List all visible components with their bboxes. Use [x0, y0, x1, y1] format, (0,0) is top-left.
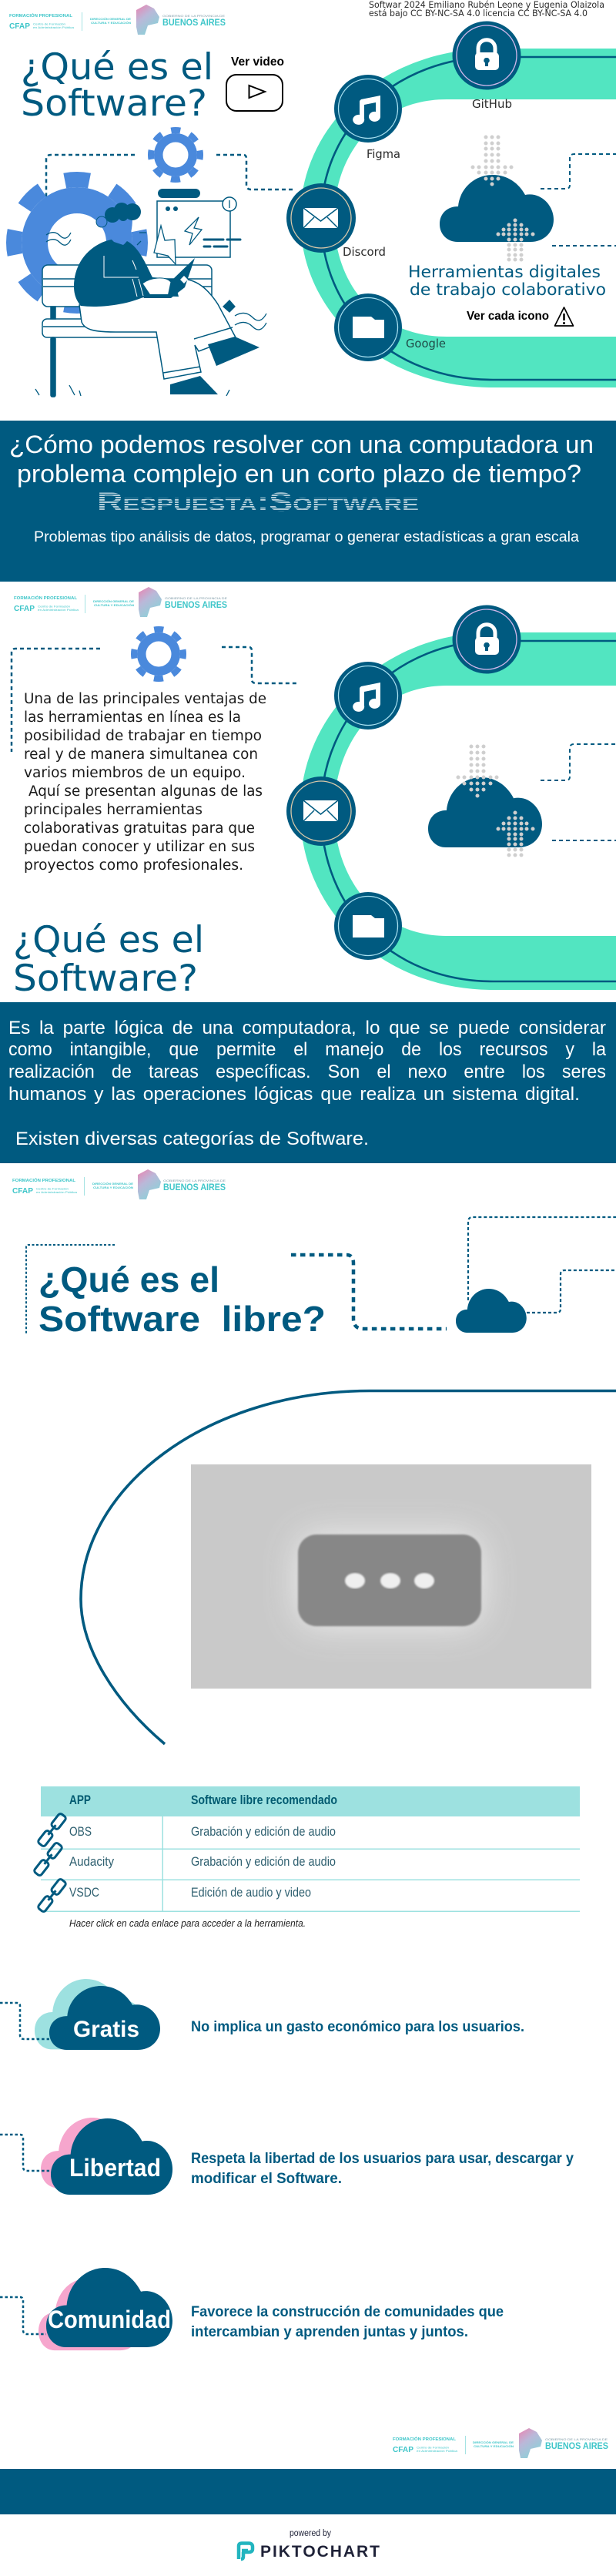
icon: top gear [151, 130, 200, 179]
logo header 1: CFAP [9, 22, 30, 31]
band: question: ¿Cómo podemos resolver con una computadora un [9, 431, 594, 458]
title: Software libre: ¿Qué es el [38, 1259, 219, 1300]
logo header 1: en Administración Pública [33, 26, 74, 29]
table rows: Edición de audio y video [191, 1885, 311, 1900]
text block: ventajas: Una de las principales ventajas de [24, 691, 266, 707]
torso [74, 239, 179, 307]
logo header 3: FORMACIÓN PROFESIONAL [12, 1177, 76, 1183]
title: Qué es el Software second [13, 919, 204, 1000]
item: Libertad: Respeta la libertad de los usuarios para usar, descargar y [191, 2151, 574, 2167]
table header [41, 1786, 580, 1816]
band: software definition: como intangible, que permite el manejo de los recursos y la [8, 1039, 607, 1060]
heading: Herramientas digitales [408, 263, 606, 300]
title: Software libre [38, 1259, 326, 1339]
heading: Herramientas digitales: Herramientas digitales [408, 263, 601, 282]
logo header 1: BUENOS AIRES [162, 18, 226, 28]
text: Ver video: Ver video [231, 55, 284, 69]
text block: ventajas: varios miembros de un equipo. [24, 765, 246, 781]
logo header 1 [9, 5, 226, 35]
item: Libertad [0, 2118, 574, 2195]
title: Software libre: Software libre? [38, 1299, 326, 1339]
navy track line [321, 57, 616, 380]
icon: play button [226, 75, 283, 111]
logo header 3: en Administración Pública [36, 1191, 77, 1194]
item: Libertad: Libertad [69, 2154, 161, 2182]
logo header 2: FORMACIÓN PROFESIONAL [14, 595, 78, 601]
icon: music note [334, 75, 402, 143]
logo header 2: Centro de Formación [38, 605, 70, 609]
table rows: Audacity [69, 1854, 114, 1869]
band: software definition: humanos y las operaciones lógicas que realiza un sistema digital. [8, 1084, 580, 1105]
item: Gratis: Gratis [73, 2017, 139, 2042]
icon: envelope [286, 776, 356, 846]
footer band [0, 2469, 616, 2514]
motion marks [35, 233, 266, 396]
item: Gratis [0, 1979, 524, 2050]
title: Qué es el Software: Software? [21, 82, 207, 125]
logo header 2: BUENOS AIRES [165, 601, 227, 610]
text block: ventajas: las herramientas en línea es la [24, 709, 241, 726]
band: question: Problemas tipo análisis de datos, programar o generar estadísticas a gran escala [34, 529, 579, 545]
table header: Software libre recomendado [191, 1793, 337, 1807]
tool labels: GitHub [472, 97, 512, 111]
icon: folder [334, 892, 402, 960]
logo header 3: BUENOS AIRES [163, 1183, 226, 1192]
dotted connectors right [541, 744, 616, 840]
logo footer: Centro de Formación [417, 2447, 449, 2450]
table header: APP [69, 1793, 91, 1807]
logo header 3: GOBIERNO DE LA PROVINCIA DE [163, 1179, 226, 1182]
shoes [170, 337, 259, 394]
logo footer: en Administración Pública [417, 2450, 457, 2453]
logo header 1: DIRECCIÓN GENERAL DE [90, 17, 132, 21]
hand and laptop [142, 278, 171, 297]
logo footer: CULTURA Y EDUCACIÓN [474, 2444, 514, 2448]
credits text: está bajo CC BY-NC-SA 4.0 licencia CC BY-NC-SA 4.0 [369, 8, 588, 18]
band: software definition [0, 1002, 616, 1163]
text block: ventajas: principales herramientas [24, 802, 203, 818]
logo header 1: GOBIERNO DE LA PROVINCIA DE [162, 14, 225, 18]
text block: ventajas [24, 691, 266, 874]
text: Ver cada icono: Ver cada icono [467, 310, 549, 323]
band: software definition: realización de tareas específicas. Son el nexo entre los seres [8, 1062, 606, 1082]
title: Qué es el Software: ¿Qué es el [21, 46, 213, 89]
dotted frame around libre heading [26, 1217, 616, 1335]
text block: ventajas: posibilidad de trabajar en tiempo [24, 728, 262, 744]
band: software definition: Existen diversas categorías de Software. [15, 1129, 369, 1149]
text block: ventajas: real y de manera simultanea con [24, 746, 258, 763]
arc line [81, 1391, 616, 1744]
item: Comunidad: Comunidad [48, 2306, 171, 2333]
logo footer: DIRECCIÓN GENERAL DE [473, 2440, 514, 2444]
logo header 1: FORMACIÓN PROFESIONAL [9, 12, 73, 18]
illustration: person with laptop on bench [14, 179, 266, 397]
logo footer: FORMACIÓN PROFESIONAL [393, 2436, 457, 2442]
table: software libre recomendado [33, 1786, 580, 1929]
heading: Herramientas digitales: de trabajo colaborativo [410, 280, 606, 300]
video placeholder [191, 1464, 591, 1689]
band: question [0, 421, 616, 582]
text block: ventajas: puedan conocer y utilizar en sus [24, 839, 255, 855]
icon: envelope [286, 183, 356, 253]
tool labels: Discord [343, 245, 386, 259]
logo header 2: GOBIERNO DE LA PROVINCIA DE [165, 596, 227, 600]
text: Respuesta Software: Respuesta:Software [97, 488, 419, 517]
table rows: Grabación y edición de audio [191, 1824, 336, 1839]
bench [42, 265, 212, 397]
big gear [14, 179, 140, 306]
logo header 1: Centro de Formación [33, 23, 65, 26]
head [106, 216, 132, 245]
item: Comunidad: Favorece la construcción de comunidades que [191, 2304, 504, 2320]
item: Libertad: modificar el Software. [191, 2171, 342, 2187]
logo footer: GOBIERNO DE LA PROVINCIA DE [545, 2437, 608, 2441]
table rows: OBS [69, 1824, 92, 1839]
title: Qué es el Software [21, 46, 213, 125]
cloud with arrows [440, 137, 554, 260]
item: Comunidad [0, 2268, 504, 2350]
navy track line [321, 641, 616, 981]
logo header 2: CULTURA Y EDUCACIÓN [94, 603, 134, 607]
logo header 2 [14, 587, 227, 617]
logo header 3: CULTURA Y EDUCACIÓN [93, 1186, 133, 1189]
logo header 3: CFAP [12, 1186, 33, 1196]
logo header 2: CFAP [14, 604, 35, 613]
screen window [154, 189, 240, 264]
dotted connector lines top [46, 155, 293, 256]
legs [79, 279, 236, 379]
logo footer [393, 2428, 608, 2458]
panel: collaborative tools track 1 [286, 22, 616, 387]
icon: folder [334, 293, 402, 361]
band: software definition: Es la parte lógica de una computadora, lo que se puede considerar [8, 1018, 606, 1038]
powered by Piktochart: PIKTOCHART [260, 2543, 380, 2561]
tool labels: Figma [367, 147, 400, 161]
table rows [69, 1824, 336, 1900]
credits text [369, 0, 604, 18]
icon: chain links [33, 1813, 67, 1913]
logo footer: BUENOS AIRES [545, 2442, 608, 2451]
title: Qué es el Software second: Software? [13, 958, 198, 1000]
icon: small cloud [456, 1289, 527, 1333]
cloud with arrows [428, 746, 542, 855]
logo header 2: en Administración Pública [38, 609, 79, 612]
logo header 2: DIRECCIÓN GENERAL DE [93, 599, 135, 603]
table note: Hacer click en cada enlace para acceder a la herramienta. [69, 1917, 306, 1929]
logo header 3 [12, 1169, 226, 1199]
icon: lock [453, 605, 521, 673]
band: question: problema complejo en un corto plazo de tiempo? [17, 460, 581, 488]
icon: music note [334, 662, 402, 730]
table rows: VSDC [69, 1885, 99, 1900]
teal track [300, 632, 616, 990]
teal track [300, 49, 616, 387]
icon: warning triangle [554, 307, 573, 326]
icon: second gear [134, 629, 183, 679]
tool labels: Google [406, 337, 446, 351]
text block: ventajas: colaborativas gratuitas para que [24, 820, 255, 837]
logo header 1: CULTURA Y EDUCACIÓN [91, 21, 131, 25]
item: Gratis: No implica un gasto económico para los usuarios. [191, 2019, 524, 2035]
icon: lock [453, 22, 521, 89]
item: Comunidad: intercambian y aprenden juntas y juntos. [191, 2324, 468, 2340]
dotted connectors right [541, 154, 616, 246]
dotted connector lines second [12, 647, 298, 752]
powered by Piktochart: powered by [290, 2529, 331, 2538]
logo header 3: Centro de Formación [36, 1188, 69, 1191]
powered by Piktochart [239, 2529, 380, 2561]
table rows: Grabación y edición de audio [191, 1854, 336, 1869]
logo footer: CFAP [393, 2445, 413, 2454]
title: Qué es el Software second: ¿Qué es el [13, 919, 204, 961]
logo header 3: DIRECCIÓN GENERAL DE [92, 1182, 134, 1186]
text block: ventajas: Aquí se presentan algunas de las [28, 783, 263, 800]
panel: collaborative tools track 2 [286, 605, 616, 990]
text block: ventajas: proyectos como profesionales. [24, 857, 243, 874]
tool labels [343, 97, 512, 351]
icon: Piktochart logo [239, 2544, 253, 2559]
